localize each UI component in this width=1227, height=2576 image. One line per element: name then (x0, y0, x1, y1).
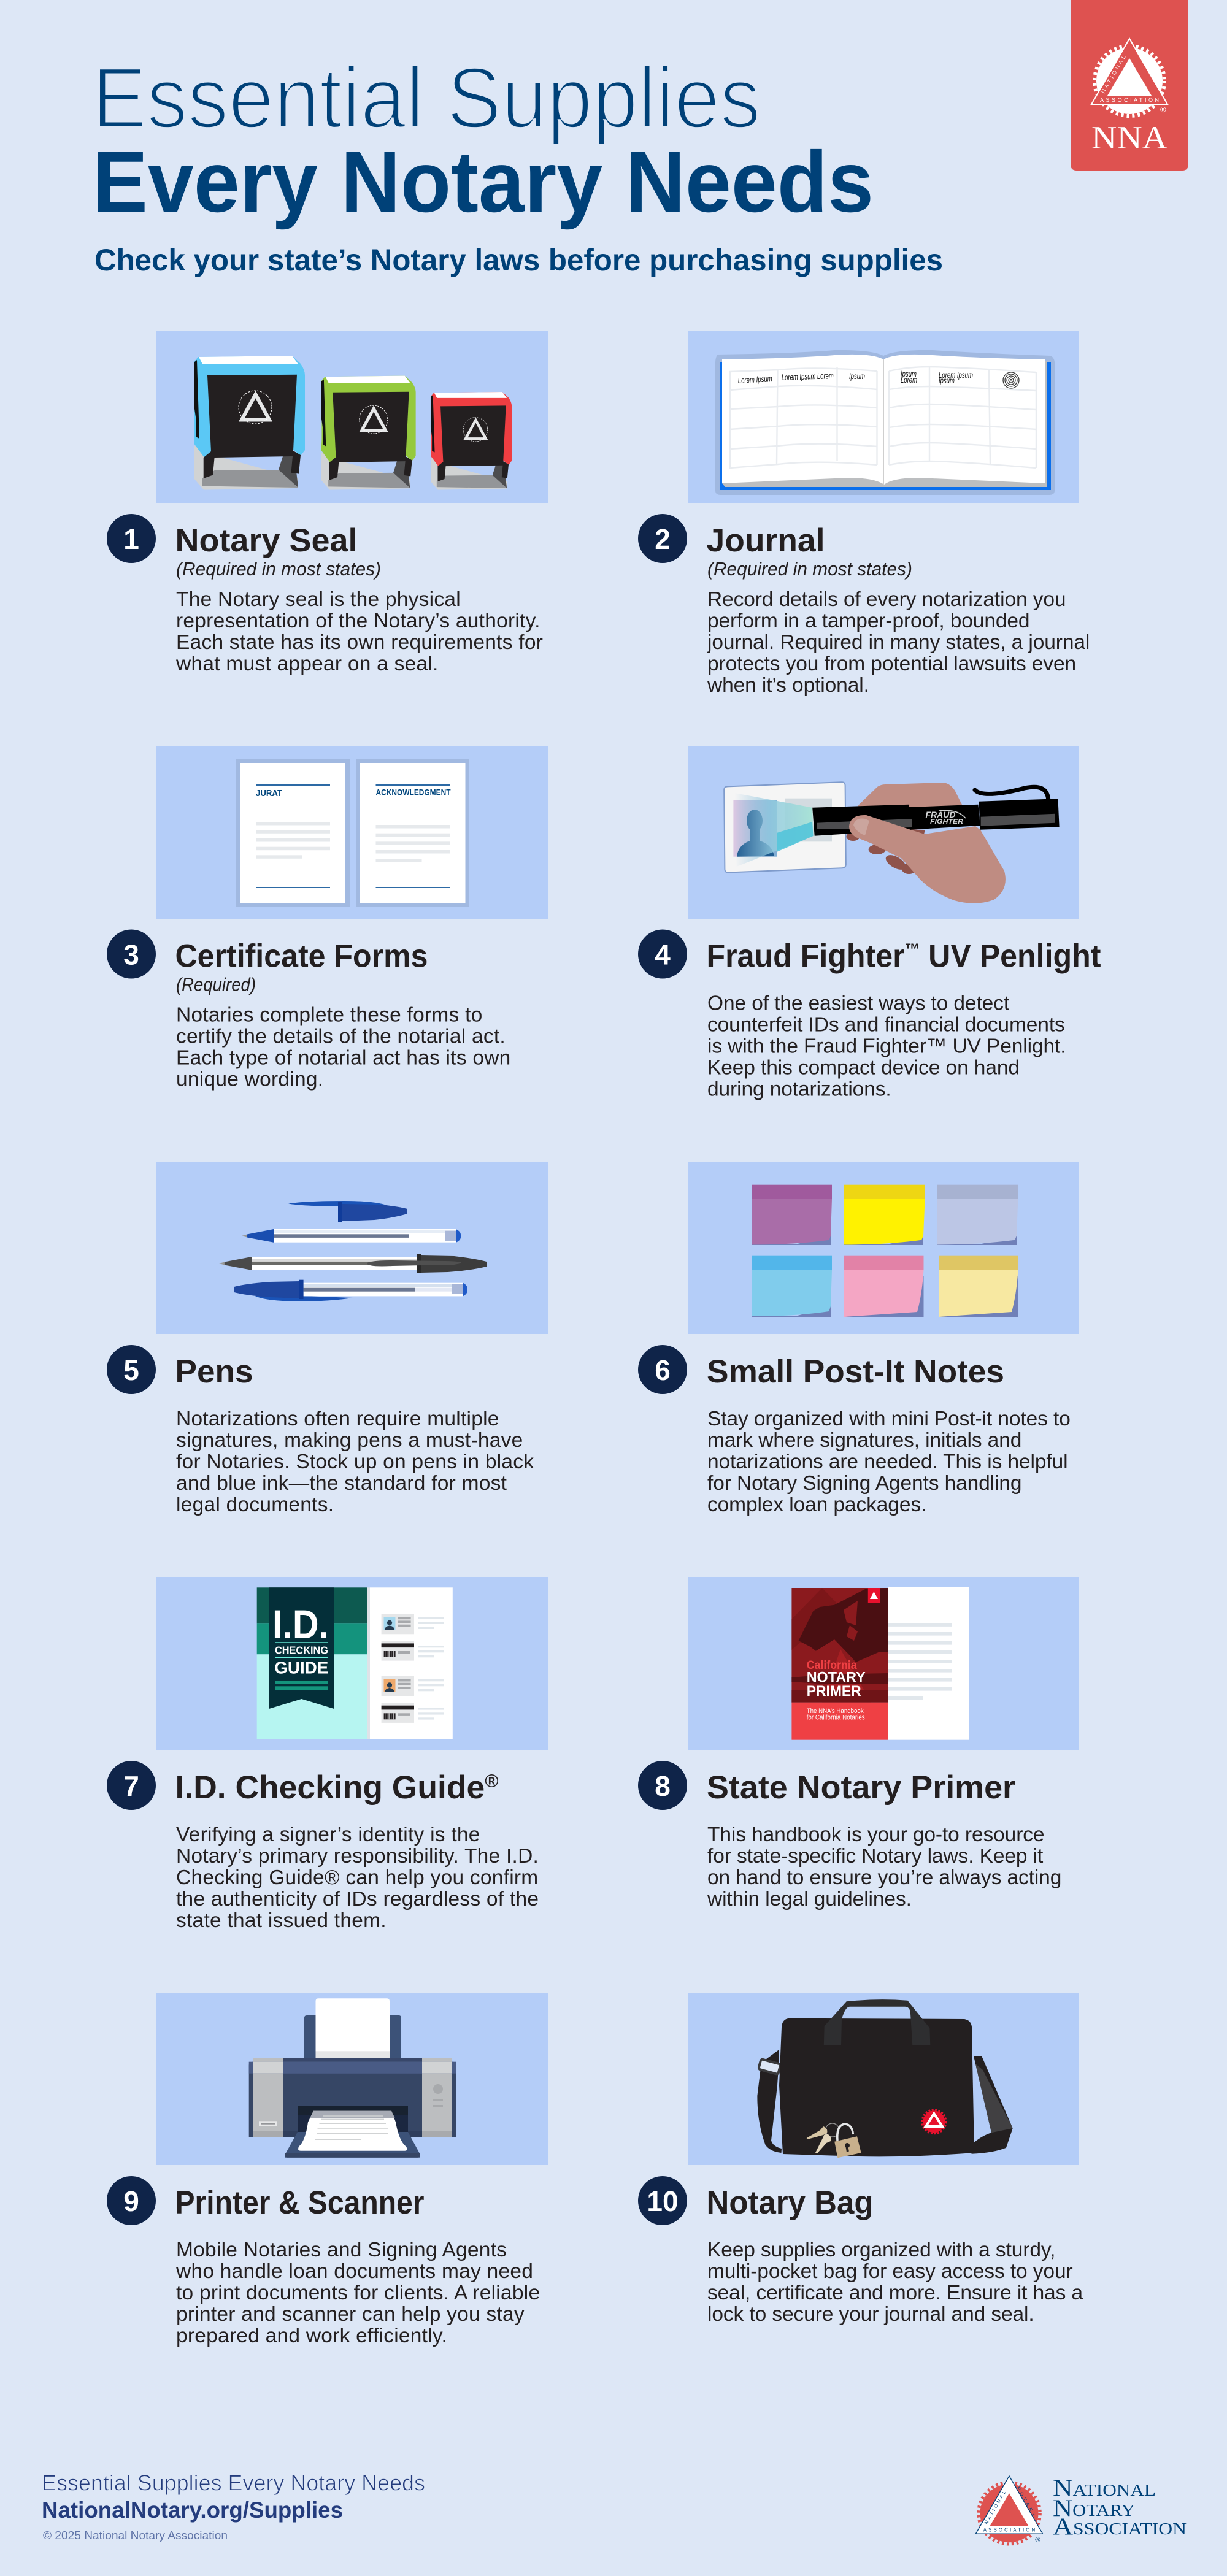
NNA logo tab: NNA (1091, 120, 1167, 156)
NNA logo tab (1071, 0, 1188, 171)
body 8: This handbook is your go-to resource (707, 1823, 1044, 1846)
body 6: mark where signatures, initials and (707, 1429, 1021, 1452)
number badge 8: 8 (655, 1770, 671, 1802)
icon: primer book cover: California (807, 1659, 857, 1672)
body 8: on hand to ensure you’re always acting (707, 1866, 1061, 1889)
footer: National Notary Association logo: ASSOCIATION (1053, 2513, 1187, 2540)
body 2: when it’s optional. (707, 674, 869, 697)
body 8: within legal guidelines. (707, 1888, 912, 1911)
body 6: notarizations are needed. This is helpful (707, 1451, 1067, 1473)
body 7: Verifying a signer’s identity is the (176, 1823, 480, 1846)
footer: National Notary Association logo: NATIONAL (1053, 2475, 1156, 2501)
illustration background 10 (688, 1993, 1079, 2165)
title line 2: Every Notary Needs (93, 133, 874, 230)
icon: blue pen (242, 1229, 461, 1243)
illustration background 5 (156, 1162, 548, 1334)
icon: guide inside page with ID cards (367, 1587, 453, 1739)
number badge 10 (638, 2176, 687, 2225)
icon: printer (249, 1998, 456, 2158)
body 1: what must appear on a seal. (175, 653, 439, 675)
icon: hand holding penlight (812, 783, 1060, 903)
body 7: Checking Guide® can help you confirm (176, 1866, 538, 1889)
icon: jurat form: JURAT (256, 788, 282, 799)
number badge 8 (638, 1761, 687, 1810)
NNA logo tab: NATIONAL (1100, 54, 1127, 94)
icon: primer book cover: The NNA’s Handbook (807, 1708, 864, 1715)
heading 4: ™ (905, 940, 920, 958)
body 6: Stay organized with mini Post-it notes to (707, 1408, 1071, 1430)
number badge 7: 7 (123, 1770, 139, 1802)
number badge 4 (638, 930, 687, 979)
NNA logo tab: ASSOCIATION (1100, 97, 1159, 103)
icon: open journal (715, 350, 1055, 495)
footer: copyright: © 2025 National Notary Association (43, 2529, 228, 2542)
icon: primer book cover: for California Notaries (807, 1714, 865, 1722)
number badge 1 (107, 514, 156, 563)
body 4: Keep this compact device on hand (707, 1056, 1020, 1079)
body 1: representation of the Notary’s authority. (176, 610, 540, 632)
heading 4: UV Penlight (920, 938, 1101, 974)
number badge 2: 2 (655, 523, 671, 555)
icon: open journal: Lorem Ipsum (939, 370, 973, 380)
icon: open journal: Lorem (901, 375, 917, 385)
number badge 7 (107, 1761, 156, 1810)
body 9: Mobile Notaries and Signing Agents (176, 2239, 507, 2261)
number badge 6 (638, 1345, 687, 1394)
illustration background 6 (688, 1162, 1079, 1334)
body 10: Keep supplies organized with a sturdy, (707, 2239, 1055, 2261)
footer: National Notary Association logo: ASSOCIATION (983, 2528, 1036, 2533)
icon: guide book cover: GUIDE (274, 1658, 328, 1677)
body 9: to print documents for clients. A reliable (176, 2282, 540, 2304)
body 2: protects you from potential lawsuits even (707, 653, 1076, 675)
illustration background 9 (156, 1993, 548, 2165)
panel: 6 Small Post-It Notes (638, 1162, 1079, 1516)
icon: red seal on bag (922, 2110, 946, 2134)
number badge 2 (638, 514, 687, 563)
body 4: during notarizations. (707, 1078, 891, 1100)
body 4: counterfeit IDs and financial documents (707, 1013, 1065, 1037)
body 3: certify the details of the notarial act. (176, 1025, 506, 1048)
icon: keys and padlock (807, 2123, 861, 2158)
number badge 9 (107, 2176, 156, 2225)
illustration background 8 (688, 1577, 1079, 1750)
icon: acknowledgment form (356, 759, 469, 907)
panel: 4 Fraud Fighter UV Penlight (638, 746, 1101, 1100)
NNA logo tab: NOTARY (1136, 50, 1161, 86)
illustration background 7 (156, 1577, 548, 1750)
illustration background 3 (156, 746, 548, 919)
body 8: for state-specific Notary laws. Keep it (707, 1845, 1044, 1868)
subtitle: Check your state’s Notary laws before purchasing supplies (94, 243, 943, 277)
icon: capped blue pen (234, 1280, 467, 1301)
number badge 10: 10 (647, 2185, 679, 2217)
icon: notary bag (757, 1999, 1013, 2156)
heading 3: Certificate Forms (175, 938, 428, 974)
footer: National Notary Association logo (975, 2475, 1187, 2544)
footer: title: Essential Supplies Every Notary Needs (42, 2471, 425, 2496)
icon: primer book cover (791, 1588, 888, 1740)
note 2: (Required in most states) (707, 558, 912, 580)
icon: primer book cover: PRIMER (807, 1683, 861, 1700)
footer: National Notary Association logo: NOTARY (1053, 2495, 1135, 2521)
panel: 3 Certificate Forms (107, 746, 548, 1091)
body 2: journal. Required in many states, a journal (707, 631, 1090, 654)
heading 10: Notary Bag (707, 2185, 874, 2221)
title line 1: Essential Supplies (92, 49, 761, 146)
body 5: for Notaries. Stock up on pens in black (176, 1451, 534, 1473)
number badge 1: 1 (123, 523, 139, 555)
icon: hand holding penlight: FIGHTER (930, 818, 963, 826)
icon: jurat form (236, 759, 350, 907)
icon: guide book cover (257, 1587, 367, 1739)
illustration background 2 (688, 331, 1079, 503)
panel: 7 I.D. Checking Guide (107, 1577, 548, 1932)
panel: 8 State Notary Primer (638, 1577, 1079, 1911)
footer: National Notary Association logo: ® (1035, 2536, 1040, 2543)
icon: acknowledgment form: ACKNOWLEDGMENT (375, 788, 451, 797)
body 7: state that issued them. (176, 1909, 387, 1932)
heading 1: Notary Seal (175, 523, 357, 559)
heading 2: Journal (707, 523, 825, 559)
icon: sticky notes grid (752, 1185, 1018, 1317)
body 10: lock to secure your journal and seal. (707, 2303, 1034, 2326)
number badge 5: 5 (123, 1354, 139, 1386)
panel: 10 Notary Bag (638, 1993, 1083, 2326)
icon: open journal: Ipsum (939, 375, 955, 385)
body 6: complex loan packages. (707, 1493, 926, 1516)
body 6: for Notary Signing Agents handling (707, 1472, 1021, 1495)
icon: hand holding penlight: FRAUD (925, 810, 956, 819)
body 7: the authenticity of IDs regardless of the (176, 1888, 539, 1911)
footer: National Notary Association logo: NOTARY (1015, 2486, 1037, 2518)
note 1: (Required in most states) (176, 558, 381, 580)
icon: primer book cover: NOTARY (807, 1669, 866, 1686)
panel: 5 Pens (107, 1162, 548, 1516)
icon: open journal: Ipsum (901, 369, 917, 378)
panel: 1 Notary Seal (107, 331, 548, 675)
number badge 3: 3 (123, 938, 139, 970)
body 5: and blue ink—the standard for most (176, 1472, 507, 1495)
icon: primer inside page (888, 1587, 969, 1740)
heading 7: I.D. Checking Guide (175, 1769, 482, 1806)
heading 4: Fraud Fighter (707, 938, 916, 974)
icon: guide book cover: CHECKING (275, 1644, 328, 1657)
panel: 9 Printer and Scanner (107, 1993, 548, 2347)
footer: URL: NationalNotary.org/Supplies (42, 2497, 343, 2523)
icon: three self-inking stamps (194, 356, 512, 490)
body 10: seal, certificate and more. Ensure it has a (707, 2282, 1083, 2304)
heading 8: State Notary Primer (707, 1769, 1015, 1806)
body 1: The Notary seal is the physical (176, 588, 461, 611)
body 1: Each state has its own requirements for (176, 631, 543, 654)
body 2: perform in a tamper-proof, bounded (707, 610, 1029, 632)
icon: open journal: Lorem Ipsum Lorem (782, 370, 834, 382)
body 10: multi-pocket bag for easy access to your (707, 2260, 1073, 2283)
number badge 6: 6 (655, 1354, 671, 1386)
body 9: prepared and work efficiently. (176, 2325, 447, 2347)
illustration background 4 (688, 746, 1079, 919)
body 5: Notarizations often require multiple (176, 1408, 499, 1430)
footer: National Notary Association logo: NATIONAL (983, 2490, 1007, 2525)
illustration background 1 (156, 331, 548, 503)
heading 5: Pens (175, 1354, 253, 1390)
icon: ID card under UV light (724, 782, 846, 873)
icon: guide book cover: I.D. (272, 1601, 329, 1647)
heading 7: ® (485, 1771, 498, 1792)
body 4: is with the Fraud Fighter™ UV Penlight. (707, 1035, 1066, 1057)
number badge 3 (107, 930, 156, 979)
body 9: printer and scanner can help you stay (176, 2303, 525, 2326)
icon: open journal: Ipsum (849, 371, 865, 381)
NNA logo tab: ® (1160, 105, 1166, 114)
body 2: Record details of every notarization you (707, 588, 1066, 611)
body 4: One of the easiest ways to detect (707, 992, 1010, 1014)
heading 6: Small Post-It Notes (707, 1354, 1004, 1390)
body 5: legal documents. (176, 1493, 334, 1516)
heading 9: Printer & Scanner (175, 2185, 425, 2221)
icon: black pen (219, 1254, 487, 1273)
body 3: Each type of notarial act has its own (176, 1046, 511, 1070)
body 5: signatures, making pens a must-have (176, 1429, 523, 1452)
body 7: Notary’s primary responsibility. The I.D. (176, 1845, 539, 1868)
number badge 4: 4 (655, 938, 671, 970)
icon: open journal: Lorem Ipsum (737, 374, 772, 385)
body 3: unique wording. (176, 1068, 323, 1091)
body 9: who handle loan documents may need (175, 2260, 533, 2283)
note 3: (Required) (176, 974, 256, 995)
icon: loose blue cap (288, 1201, 407, 1222)
body 3: Notaries complete these forms to (176, 1003, 483, 1027)
number badge 9: 9 (123, 2185, 139, 2217)
number badge 5 (107, 1345, 156, 1394)
panel: 2 Journal (638, 331, 1090, 697)
